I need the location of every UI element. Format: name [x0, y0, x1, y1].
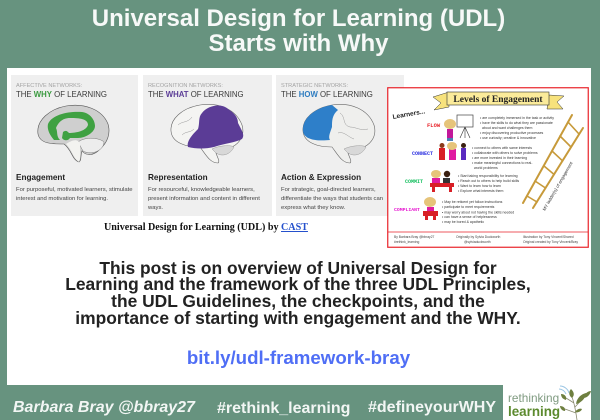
level: connect: • collaborate with others to solve problems — [472, 151, 538, 155]
panel: how of learning: express what they know. — [281, 205, 345, 211]
panel: why of learning — [11, 75, 138, 216]
level: compliant: • may be bored & apathetic — [442, 220, 484, 224]
caption: UDL by CAST: Universal Design for Learning (UDL) by CAST — [104, 222, 308, 232]
panel: white content — [7, 68, 591, 385]
panel: what of learning: ways. — [148, 205, 163, 211]
footer: hashtag define: #defineyourWHY — [368, 399, 496, 416]
level: compliant: • may worry about not having the skills needed — [442, 210, 514, 214]
panel: how of learning: THE HOW OF LEARNING — [281, 90, 373, 99]
level: commit — [405, 170, 519, 193]
panel: why of learning: interest and motivation for learning. — [16, 196, 108, 202]
banner: levels of engagement: Levels of Engagement — [453, 95, 543, 105]
level: commit: • Start taking responsibility for learning — [458, 174, 518, 178]
level: connect: • make meaningful connections to real- — [472, 161, 533, 165]
level: commit: • Reach out to others to help build skills — [458, 179, 519, 183]
level: connect: • connect to others with same interests — [472, 146, 532, 150]
logo: rethinking learning — [503, 385, 591, 420]
credits: Originally by Sylvia Duckworth — [456, 235, 501, 239]
level: compliant: • can have a sense of helplessness — [442, 215, 497, 219]
icon: brain with green affective network — [38, 104, 110, 162]
label: ladder caption: MY ladder(s) of engagement — [542, 160, 574, 212]
icon: brain with blue strategic network — [302, 104, 376, 164]
logo: rethinking learning: rethinking — [508, 391, 559, 405]
icon: leaves — [559, 386, 591, 420]
text block: summary: This post is on overview of Universal Design for — [99, 258, 497, 278]
text block: summary: Learning and the framework of the three UDL Principles, — [65, 274, 531, 294]
text block: summary — [65, 258, 531, 328]
level: flow — [427, 115, 554, 141]
panel: how of learning: For strategic, goal-directed learners, — [281, 186, 376, 192]
credits: By Barbara Bray @bbray27 — [394, 235, 435, 239]
level: flow: • are completely immersed in the task or activity — [480, 116, 554, 120]
label: learners: Learners... — [392, 108, 426, 121]
level: compliant — [394, 197, 514, 224]
level: connect — [412, 142, 538, 170]
panel: levels of engagement — [387, 87, 589, 248]
level: connect: CONNECT — [412, 151, 433, 157]
level: compliant: • May be reticent yet follow instructions — [442, 200, 503, 204]
banner: levels of engagement — [433, 92, 564, 110]
level: flow: • have the skills to do what they are passionate — [480, 121, 553, 125]
panel: why of learning: AFFECTIVE NETWORKS: — [16, 83, 82, 89]
text block: summary: the UDL Guidelines, the checkpoints, and the — [111, 291, 485, 311]
level: flow: • use curiosity; creative & innovative — [480, 136, 536, 140]
panel: why of learning: THE WHY OF LEARNING — [16, 90, 107, 99]
level: connect: • are more invested in their learning — [472, 156, 527, 160]
credits: Illustration by Tony Vincent/Shared — [523, 235, 574, 239]
title: Starts with Why — [208, 30, 388, 57]
panel: how of learning: STRATEGIC NETWORKS: — [281, 83, 348, 89]
link: bit.ly/udl-framework-bray — [187, 347, 410, 368]
title — [92, 5, 505, 57]
logo word: learning — [508, 404, 560, 419]
icon: ladder — [523, 115, 583, 208]
panel: how of learning: differentiate the ways that students can — [281, 196, 383, 202]
level: commit: COMMIT — [405, 179, 423, 185]
credits — [394, 235, 578, 244]
level: commit: • Explore what interests them — [458, 189, 503, 193]
panel: why of learning: For purposeful, motivated learners, stimulate — [16, 186, 133, 192]
footer: hashtag rethink: #rethink_learning — [217, 400, 350, 417]
credits: @sylviaduckworth — [464, 240, 491, 244]
footer: author: Barbara Bray @bbray27 — [13, 399, 195, 416]
text block: summary: importance of starting with engagement and the WHY. — [75, 308, 521, 328]
panel: what of learning: THE WHAT OF LEARNING — [148, 90, 244, 99]
panel: how of learning — [276, 75, 404, 216]
level: connect: world problems — [474, 166, 498, 170]
level: flow: • enjoy discovering productive processes — [480, 131, 544, 135]
level: compliant: • participate to meet requirements — [442, 205, 495, 209]
credits: #rethink_learning — [394, 240, 419, 244]
level: flow: about and want challenges them — [482, 126, 532, 130]
panel: what of learning: present information and content in different — [148, 196, 260, 202]
panel: what of learning: Representation — [148, 173, 208, 182]
icon: brain with purple recognition network — [170, 104, 244, 164]
level: commit: • Want to learn how to learn — [458, 184, 501, 188]
title: Universal Design for Learning (UDL) — [92, 5, 505, 32]
panel: how of learning: Action & Expression — [281, 173, 361, 182]
panel: what of learning: For resourceful, knowledgeable learners, — [148, 186, 255, 192]
credits: Original created by Tony Vincent/Bray — [523, 240, 578, 244]
panel: why of learning: Engagement — [16, 173, 65, 182]
panel: what of learning — [143, 75, 272, 216]
level: flow: FLOW — [427, 122, 441, 129]
level: compliant: COMPLIANT — [394, 207, 420, 213]
panel: what of learning: RECOGNITION NETWORKS: — [148, 83, 223, 89]
